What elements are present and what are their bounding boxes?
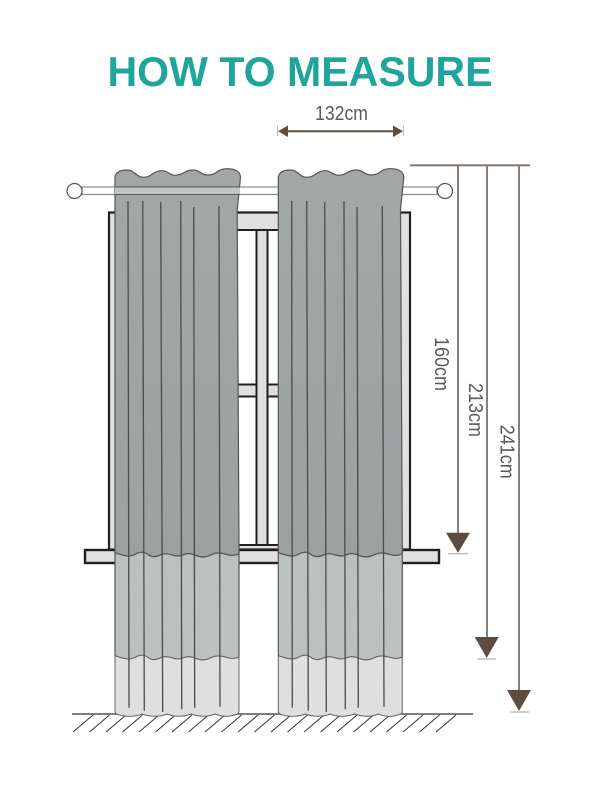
- ground hatching: [72, 714, 473, 732]
- drop arrow: 241cm: [507, 165, 531, 712]
- vertical mullion: [256, 230, 268, 545]
- height dimensions: [410, 165, 531, 712]
- rod finial left: [67, 184, 82, 198]
- window frame: [109, 212, 410, 550]
- drop arrow: 213cm: [475, 165, 499, 659]
- window: [85, 212, 439, 563]
- curtain pleats: [128, 201, 220, 712]
- curtain panel: right: [278, 169, 404, 716]
- curtain pleats: [292, 201, 384, 712]
- label: 213cm: 213cm: [464, 383, 487, 437]
- label: 241cm: 241cm: [496, 425, 519, 479]
- curtain body bands: [278, 169, 404, 716]
- rod finial right: [438, 184, 452, 198]
- label: 160cm: 160cm: [430, 337, 453, 391]
- width label: 132cm: [315, 102, 368, 125]
- drop arrow: 160cm: [446, 165, 470, 554]
- width arrow: [278, 126, 403, 137]
- window sill: [85, 550, 439, 563]
- rod showing through: [115, 187, 240, 194]
- top reference line: [410, 164, 530, 166]
- curtain rod: [67, 184, 452, 198]
- horizontal muntin: [118, 384, 400, 396]
- width dimension: 132cm: [278, 102, 403, 137]
- title: HOW TO MEASURE: [108, 48, 492, 95]
- curtain panel: left: [115, 169, 240, 716]
- window panes: [118, 230, 400, 545]
- curtain body bands: [115, 169, 240, 716]
